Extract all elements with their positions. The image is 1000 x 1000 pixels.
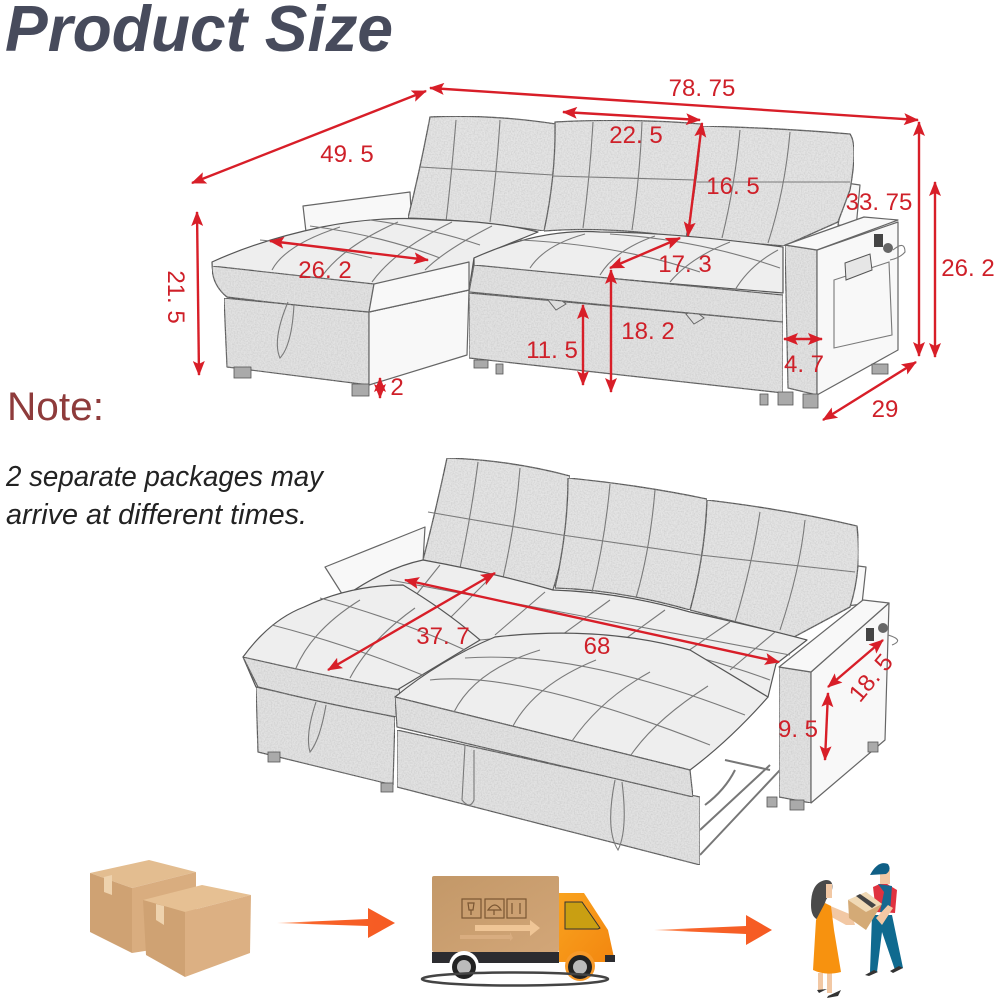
illustration: sofa extended as bed — [243, 458, 898, 865]
dimension: 2: 2 — [390, 374, 404, 401]
right back post — [838, 183, 860, 228]
courier — [865, 863, 903, 976]
text block: note body — [5, 461, 325, 531]
customer — [811, 880, 855, 998]
box back — [90, 860, 196, 953]
dimension: 4.7 — [784, 339, 824, 378]
cab window — [565, 902, 600, 929]
dimension: 49.5 — [192, 91, 426, 183]
back cushion middle — [555, 478, 707, 610]
cargo arrows — [475, 920, 540, 936]
icon: delivery truck — [422, 876, 615, 986]
ground ring — [422, 972, 608, 986]
right back post — [840, 565, 866, 607]
dimension: 18.5 — [828, 640, 899, 707]
left arm — [325, 527, 425, 597]
dimension: 68: 68 — [584, 633, 610, 660]
left arm — [303, 192, 412, 240]
wheels — [449, 951, 595, 981]
sockets — [866, 623, 898, 645]
chassis — [432, 952, 559, 963]
dimension: 33.75: 33. 75 — [846, 189, 912, 216]
main seat base — [469, 293, 783, 393]
cushion tufting — [420, 120, 850, 243]
arrow: boxes to truck — [277, 908, 395, 938]
text block: note body: arrive at different times. — [6, 499, 307, 531]
pull-out base — [397, 730, 700, 865]
dimension: 18.5: 18. 5 — [844, 649, 899, 707]
folding frame — [700, 760, 780, 855]
pull-out cushion — [395, 633, 768, 770]
legs — [268, 742, 878, 810]
icon: courier handing box to customer — [811, 863, 903, 998]
dimension: 17.3 — [610, 238, 712, 278]
dimension: 29: 29 — [872, 396, 898, 423]
dimension: 17.3: 17. 3 — [658, 251, 712, 278]
dimension: 9.5: 9. 5 — [778, 716, 818, 743]
right arm — [779, 667, 811, 803]
dimension: 37.7: 37. 7 — [416, 623, 470, 650]
dimension: 9.5 — [778, 693, 828, 760]
dimension: 78.75 — [430, 75, 918, 120]
back cushion middle — [544, 120, 701, 238]
dimension: 18.2: 18. 2 — [621, 318, 675, 345]
chaise strap — [277, 302, 294, 358]
cargo box — [432, 876, 559, 952]
icon: two cardboard boxes — [90, 860, 251, 977]
box front — [143, 885, 251, 977]
seat area behind pullout — [300, 560, 807, 697]
dimension: 21.5: 21. 5 — [162, 270, 189, 324]
dimension: 68 — [405, 580, 779, 662]
dimension: 49.5: 49. 5 — [320, 141, 374, 168]
dimension: 78.75: 78. 75 — [669, 75, 735, 102]
side pocket and sockets — [834, 234, 905, 348]
dimension: 22.5 — [563, 112, 700, 149]
dimension: 37.7 — [328, 573, 495, 670]
arrow: truck to customer — [654, 915, 772, 945]
dimension: 16.5: 16. 5 — [706, 173, 760, 200]
main seat cushion — [474, 232, 783, 293]
chaise base — [256, 687, 395, 785]
dimension: 29 — [823, 362, 916, 423]
dimension: 16.5 — [688, 123, 760, 236]
chaise cushion — [243, 585, 480, 690]
dimension: 4.7: 4. 7 — [784, 351, 824, 378]
illustration: sofa with chaise — [212, 116, 905, 408]
dimension: 11.5 — [526, 305, 583, 385]
dimension: 18.2 — [611, 270, 675, 392]
pull handles — [548, 296, 704, 324]
cab — [559, 893, 615, 962]
back cushion left — [423, 458, 570, 590]
handling symbols — [462, 899, 526, 918]
back cushion right — [686, 126, 854, 246]
dimension: 26.2 seat: 26. 2 — [298, 257, 352, 284]
chaise base — [224, 298, 369, 385]
back cushion left — [408, 116, 556, 231]
right arm — [785, 245, 817, 395]
parcel — [848, 892, 882, 930]
pull-out straps — [462, 745, 624, 850]
dimension: 11.5: 11. 5 — [526, 337, 578, 364]
dimension: 26.2 seat — [270, 241, 428, 284]
legs — [234, 360, 888, 408]
dimension: 2 — [380, 374, 404, 401]
text block: note body: 2 separate packages may — [5, 461, 325, 493]
chaise seat cushion — [212, 219, 538, 312]
chaise strap — [308, 702, 326, 752]
heading: note: Note: — [7, 385, 104, 429]
back cushion right — [690, 500, 858, 637]
dimension: 22.5: 22. 5 — [609, 122, 663, 149]
dimension: 26.2 height: 26. 2 — [941, 255, 995, 282]
